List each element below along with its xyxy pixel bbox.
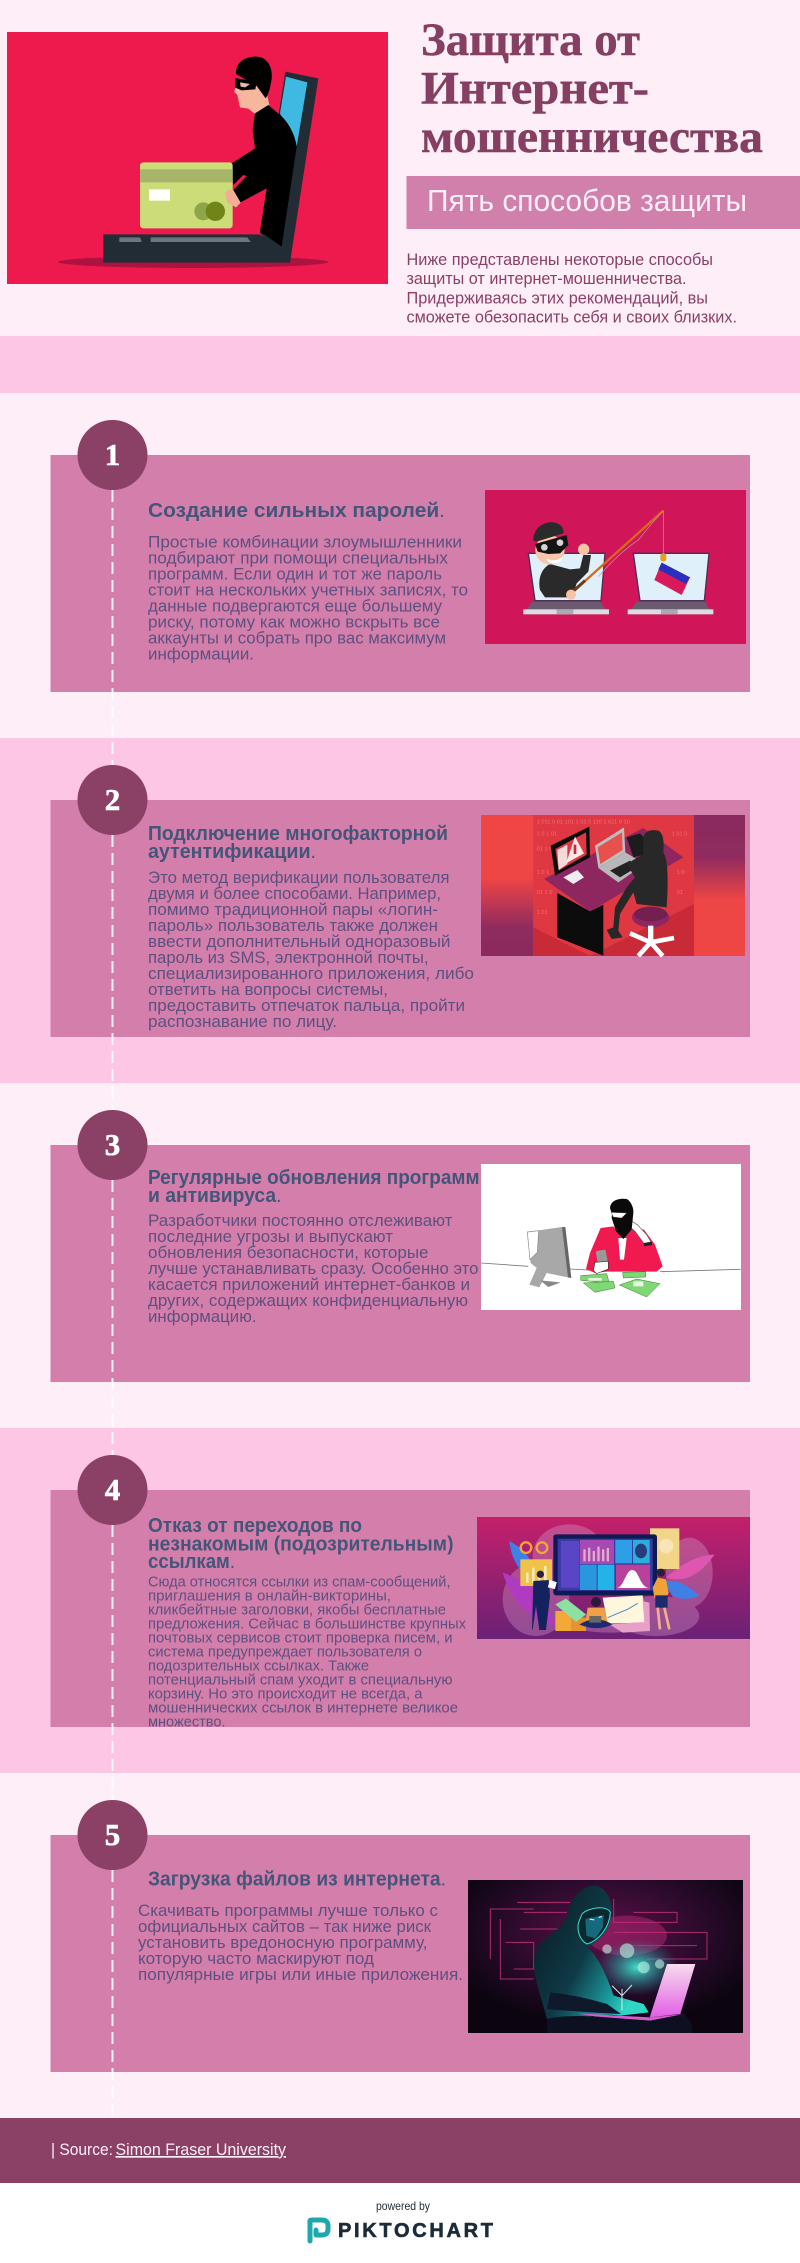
intro text: Ниже представлены некоторые способы bbox=[406, 251, 713, 269]
heading 5: Загрузка файлов из интернета. bbox=[148, 1869, 446, 1891]
illustration: phishing with fishing rod between laptops bbox=[485, 490, 746, 644]
illustration: hacker at desk with warning screen: 01 1 0 bbox=[537, 847, 552, 853]
body text 4: подозрительных ссылках. Также bbox=[148, 1659, 369, 1675]
panel: step 2 multi-factor authentication bbox=[50, 765, 750, 1110]
panel: step 4 suspicious links bbox=[50, 1455, 750, 1800]
body text 4: приглашения в онлайн-викторины, bbox=[148, 1589, 391, 1605]
body text 2: ответить на вопросы системы, bbox=[148, 980, 388, 999]
powered by Piktochart logo: PIKTOCHART bbox=[338, 2220, 493, 2242]
body text 1: аккаунты и собрать про вас максимум bbox=[148, 628, 446, 647]
title: мошенничества bbox=[421, 111, 763, 163]
body text 1: риску, потому как можно вскрыть все bbox=[148, 612, 440, 631]
body text 2: Это метод верификации пользователя bbox=[148, 868, 449, 887]
heading 4 bbox=[148, 1515, 454, 1573]
intro text: защиты от интернет-мошенничества. bbox=[406, 270, 686, 288]
heading 2: аутентификации. bbox=[148, 841, 316, 863]
heading 3 bbox=[148, 1167, 480, 1207]
number badge 4: 4 bbox=[105, 1472, 120, 1507]
body text 2 bbox=[148, 868, 474, 1031]
body text 3: других, содержащих конфиденциальную bbox=[148, 1291, 468, 1310]
number badge 3: 3 bbox=[105, 1127, 120, 1162]
body text 4: система предупреждает пользователя о bbox=[148, 1645, 422, 1661]
illustration: hacker at desk with warning screen: 1 011 0 01 101 1 01 0 110 1 011 0 10 bbox=[537, 819, 630, 825]
number badge 1: 1 bbox=[105, 437, 120, 472]
intro text bbox=[406, 251, 737, 326]
body text 2: помимо традиционной пары «логин- bbox=[148, 900, 438, 919]
hero illustration: thief stealing a bank card through a laptop bbox=[7, 32, 388, 284]
body text 1: программ. Если один и тот же пароль bbox=[148, 564, 442, 583]
heading 4: незнакомым (подозрительным) bbox=[148, 1534, 454, 1556]
number badge 5: 5 bbox=[105, 1817, 120, 1852]
body text 4: множество. bbox=[148, 1715, 226, 1731]
number badge 3 bbox=[78, 1110, 148, 1180]
illustration: hacker at desk with warning screen: 1 0 1 bbox=[537, 870, 549, 876]
body text 1: Простые комбинации злоумышленники bbox=[148, 532, 462, 551]
illustration: hacker at desk with warning screen bbox=[481, 815, 745, 956]
body text 1: подбирают при помощи специальных bbox=[148, 548, 449, 567]
body text 5: установить вредоносную программу, bbox=[138, 1933, 428, 1952]
body text 2: распознавание по лицу. bbox=[148, 1012, 337, 1031]
body text 3: обновления безопасности, которые bbox=[148, 1243, 428, 1262]
body text 4: мошеннических ссылок в интернете великое bbox=[148, 1701, 458, 1717]
body text 5: Скачивать программы лучше только с bbox=[138, 1901, 438, 1920]
body text 3: лучше устанавливать сразу. Особенно это bbox=[148, 1259, 479, 1278]
title bbox=[421, 14, 763, 163]
body text 2: пароль» пользователь также должен bbox=[148, 916, 438, 935]
body text 1: информации. bbox=[148, 644, 254, 663]
body text 1 bbox=[148, 532, 468, 663]
number badge 5 bbox=[78, 1800, 148, 1870]
number badge 2: 2 bbox=[105, 782, 120, 817]
body text 4: предложения. Сейчас в большинстве крупных bbox=[148, 1617, 467, 1633]
footer source bar: | Source: bbox=[51, 2140, 113, 2159]
body text 3: касается приложений интернет-банков и bbox=[148, 1275, 470, 1294]
body text 2: пароль из SMS, электронной почты, bbox=[148, 948, 428, 967]
number badge 2 bbox=[78, 765, 148, 835]
number badge 1 bbox=[78, 420, 148, 490]
panel: step 5 downloading files bbox=[50, 1800, 750, 2118]
body text 4: потенциальный спам уходит в специальную bbox=[148, 1673, 453, 1689]
body text 3 bbox=[148, 1211, 479, 1326]
intro text: сможете обезопасить себя и своих близких. bbox=[406, 308, 737, 326]
heading 3: и антивируса. bbox=[148, 1185, 282, 1207]
panel: step 3 program updates bbox=[50, 1110, 750, 1455]
powered by Piktochart logo bbox=[310, 2199, 493, 2242]
body text 2: предоставить отпечаток пальца, пройти bbox=[148, 996, 465, 1015]
footer source bar: Simon Fraser University bbox=[116, 2140, 286, 2159]
illustration: hacker at desk with warning screen: 1 01 0 bbox=[672, 832, 687, 838]
heading 4: ссылкам. bbox=[148, 1551, 235, 1573]
body text 5: которую часто маскируют под bbox=[138, 1949, 374, 1968]
intro text: Придерживаясь этих рекомендаций, вы bbox=[406, 290, 708, 308]
body text 5: официальных сайтов – так ниже риск bbox=[138, 1917, 432, 1936]
illustration: hacker at desk with warning screen: 1 0 bbox=[677, 870, 685, 876]
subtitle banner bbox=[406, 176, 800, 229]
powered by Piktochart logo: powered by bbox=[376, 2199, 430, 2213]
heading 3: Регулярные обновления программ bbox=[148, 1167, 480, 1189]
body text 3: последние угрозы и выпускают bbox=[148, 1227, 393, 1246]
illustration: hacker at desk with warning screen: 1 0 1 01 bbox=[537, 832, 557, 838]
body text 4: почтовых сервисов стоит проверка писем, и bbox=[148, 1631, 452, 1647]
body text 2: ввести дополнительный одноразовый bbox=[148, 932, 450, 951]
body text 4 bbox=[148, 1575, 467, 1731]
panel: step 1 strong passwords bbox=[50, 420, 750, 765]
body text 2: двумя и более способами. Например, bbox=[148, 884, 441, 903]
heading 2 bbox=[148, 823, 448, 863]
body text 5 bbox=[138, 1901, 463, 1984]
illustration: hooded hacker at a glowing laptop bbox=[468, 1880, 743, 2033]
subtitle banner: Пять способов защиты bbox=[427, 183, 747, 218]
title: Защита от bbox=[421, 14, 640, 66]
body text 4: кликбейтные заголовки, якобы бесплатные bbox=[148, 1603, 446, 1619]
body text 4: корзину. Но это происходит не всегда, а bbox=[148, 1687, 423, 1703]
body text 1: данные подвергаются еще большему bbox=[148, 596, 443, 615]
illustration: masked man in red jacket with phone and money bbox=[481, 1164, 741, 1310]
illustration: people around a data dashboard bbox=[477, 1517, 750, 1639]
heading 4: Отказ от переходов по bbox=[148, 1515, 362, 1537]
footer source bar bbox=[0, 2118, 800, 2183]
illustration: hacker at desk with warning screen: 01 1 0 bbox=[537, 890, 552, 896]
title: Интернет- bbox=[421, 62, 649, 114]
body text 3: Разработчики постоянно отслеживают bbox=[148, 1211, 453, 1230]
heading 2: Подключение многофакторной bbox=[148, 823, 448, 845]
body text 4: Сюда относятся ссылки из спам-сообщений, bbox=[148, 1575, 450, 1591]
illustration: hacker at desk with warning screen: 01 bbox=[677, 890, 683, 896]
body text 5: популярные игры или иные приложения. bbox=[138, 1965, 463, 1984]
heading 1: Создание сильных паролей . bbox=[148, 500, 445, 522]
body text 1: стоит на нескольких учетных записях, то bbox=[148, 580, 468, 599]
illustration: hacker at desk with warning screen: 1 01 bbox=[537, 910, 548, 916]
body text 2: специализированного приложения, либо bbox=[148, 964, 474, 983]
body text 3: информацию. bbox=[148, 1307, 256, 1326]
number badge 4 bbox=[78, 1455, 148, 1525]
